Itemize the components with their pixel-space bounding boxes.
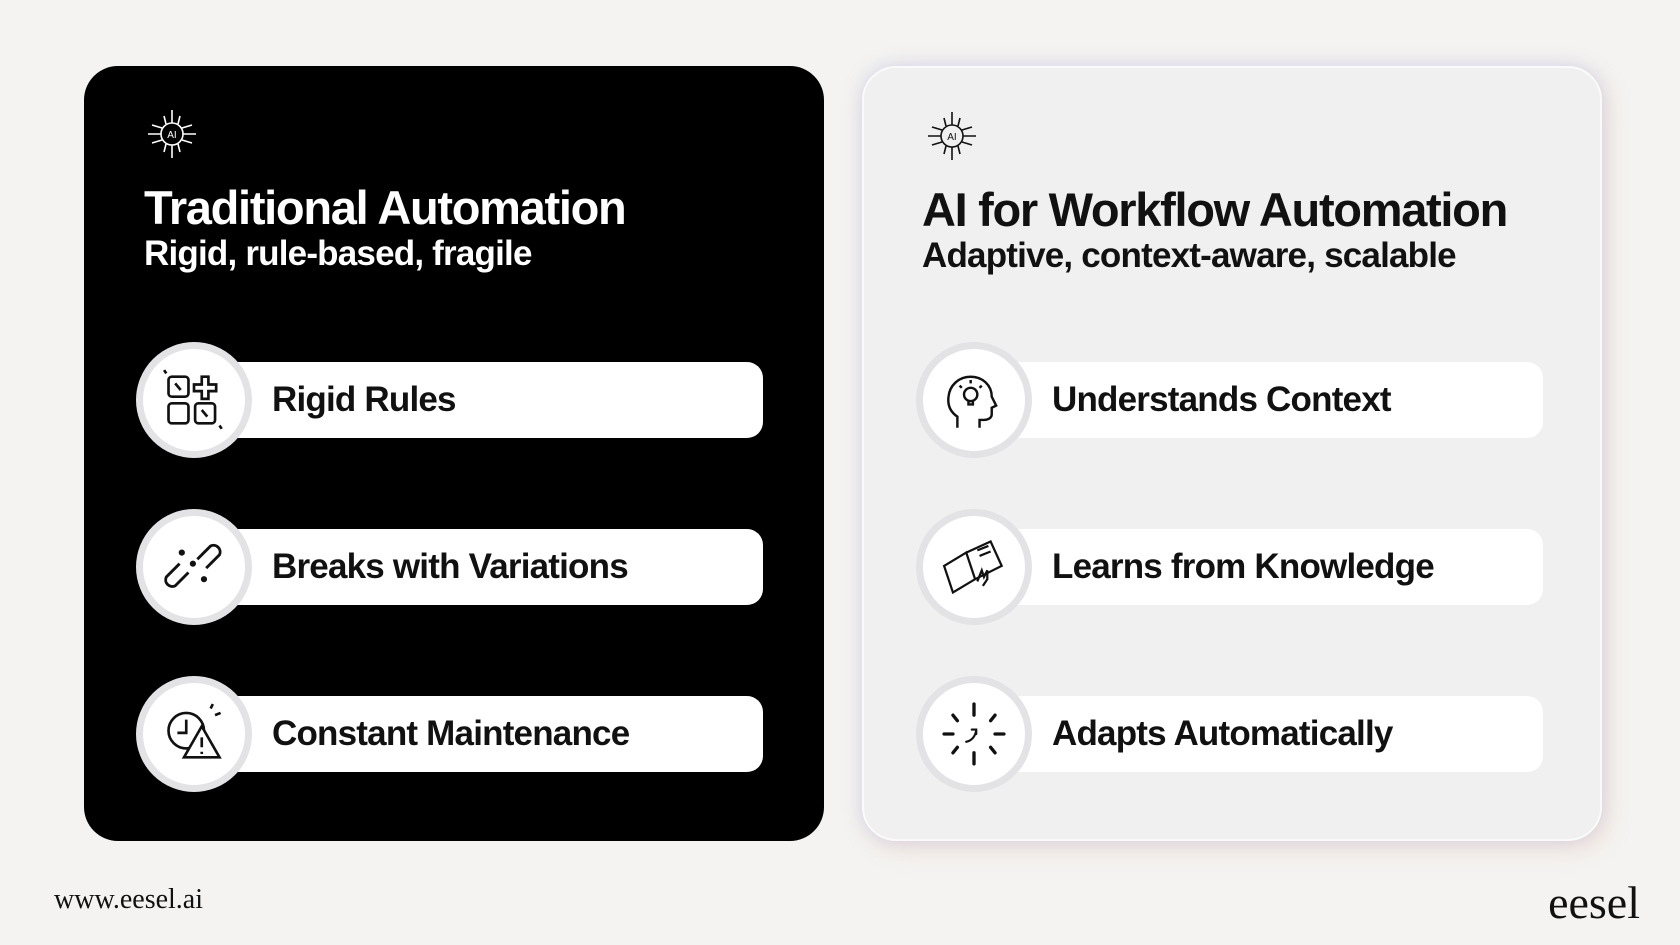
icon: broken chain — [136, 509, 252, 625]
footer url: www.eesel.ai — [54, 884, 203, 915]
icon: head lightbulb — [916, 342, 1032, 458]
row: adapts automatically: Adapts Automatically — [1052, 714, 1393, 753]
icon: burst arrow — [916, 676, 1032, 792]
row: breaks with variations: Breaks with Variations — [272, 547, 628, 586]
icon: grid — [136, 342, 252, 458]
icon: AI chip — [148, 110, 196, 158]
title: AI for Workflow Automation — [922, 183, 1507, 236]
icon: AI chip: AI — [947, 132, 957, 143]
title: Traditional Automation — [144, 181, 625, 234]
row: understands context: Understands Context — [1052, 380, 1391, 419]
panel: traditional automation — [84, 66, 824, 841]
row: adapts automatically — [916, 676, 1543, 792]
row: rigid rules — [136, 342, 763, 458]
row: understands context — [916, 342, 1543, 458]
icon: open book — [916, 509, 1032, 625]
row: constant maintenance: Constant Maintenance — [272, 714, 629, 753]
icon: AI chip: AI — [167, 130, 177, 141]
row: learns from knowledge — [916, 509, 1543, 625]
row: learns from knowledge: Learns from Knowledge — [1052, 547, 1434, 586]
row: rigid rules: Rigid Rules — [272, 380, 456, 419]
icon: clock warning — [136, 676, 252, 792]
subtitle: Adaptive, context-aware, scalable — [922, 236, 1456, 275]
row: breaks with variations — [136, 509, 763, 625]
panel: AI workflow automation — [862, 66, 1602, 841]
row: constant maintenance — [136, 676, 763, 792]
footer logo: eesel — [1548, 877, 1640, 928]
subtitle: Rigid, rule-based, fragile — [144, 234, 532, 273]
icon: AI chip — [928, 112, 976, 160]
